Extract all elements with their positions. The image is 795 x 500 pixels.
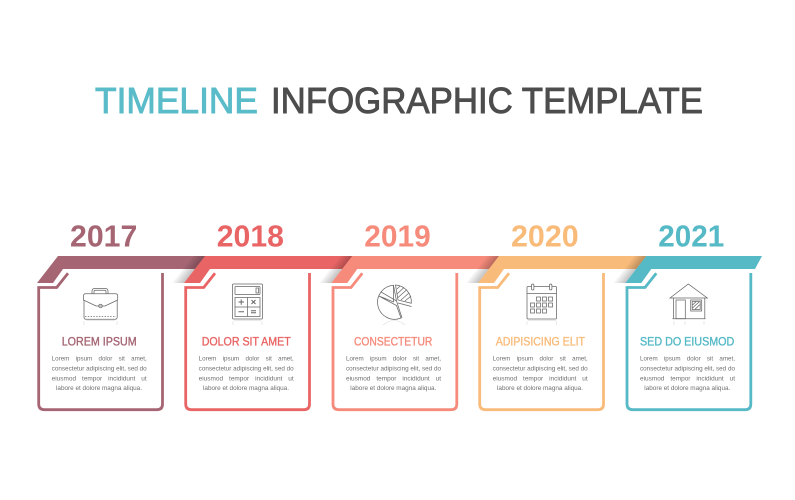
- body text: [52, 356, 147, 392]
- year 2020: 2020: [511, 219, 579, 254]
- body text: Lorem ipsum dolor sit amet,: [52, 356, 147, 363]
- ribbon 2018: [172, 256, 357, 283]
- panel: 2017: [37, 219, 210, 410]
- body text: labore et dolore magna aliqua.: [350, 385, 437, 392]
- year 2017: 2017: [70, 219, 137, 254]
- title: INFOGRAPHIC TEMPLATE: [271, 80, 703, 121]
- heading: ADIPISICING ELIT: [496, 336, 585, 348]
- panel: 2019: [319, 219, 504, 410]
- body text: Lorem ipsum dolor sit amet,: [640, 356, 735, 363]
- body text: Lorem ipsum dolor sit amet,: [493, 356, 588, 363]
- body text: consectetur adipiscing elit, sed do: [52, 366, 147, 372]
- body text: consectetur adipiscing elit, sed do: [346, 366, 442, 372]
- body text: [199, 356, 294, 392]
- body text: consectetur adipiscing elit, sed do: [640, 366, 736, 372]
- body text: Lorem ipsum dolor sit amet,: [199, 356, 294, 363]
- year 2018: 2018: [217, 219, 284, 254]
- year 2019: 2019: [364, 219, 431, 254]
- ribbon 2017: [37, 256, 210, 283]
- body text: [346, 356, 442, 392]
- card outline 2021: [627, 273, 751, 410]
- body text: Lorem ipsum dolor sit amet,: [346, 356, 441, 363]
- body text: labore et dolore magna aliqua.: [203, 385, 289, 392]
- body text: eiusmod tempor incididunt ut: [199, 375, 294, 382]
- ribbon 2019: [319, 256, 504, 283]
- body text: [493, 356, 588, 392]
- body text: consectetur adipiscing elit, sed do: [493, 366, 588, 372]
- card outline 2019: [333, 273, 457, 410]
- heading: DOLOR SIT AMET: [202, 336, 291, 348]
- ribbon 2021: [613, 256, 762, 283]
- ribbon 2020: [466, 256, 651, 283]
- card outline 2017: [39, 273, 163, 410]
- icon: house: [670, 284, 707, 325]
- icon: calendar: [527, 284, 556, 325]
- icon: briefcase: [84, 288, 118, 325]
- panel: 2018: [172, 219, 357, 410]
- heading: LOREM IPSUM: [62, 336, 137, 348]
- icon: calculator: [232, 284, 262, 325]
- heading: CONSECTETUR: [354, 336, 432, 348]
- body text: labore et dolore magna aliqua.: [497, 385, 583, 392]
- panel: 2020: [466, 219, 651, 410]
- icon: pie chart: [378, 285, 412, 325]
- body text: labore et dolore magna aliqua.: [56, 385, 142, 392]
- body text: consectetur adipiscing elit, sed do: [199, 366, 294, 372]
- body text: [640, 356, 736, 392]
- body text: eiusmod tempor incididunt ut: [640, 375, 735, 382]
- heading: SED DO EIUSMOD: [640, 336, 734, 348]
- body text: eiusmod tempor incididunt ut: [493, 375, 588, 382]
- card outline 2018: [186, 273, 310, 410]
- title: [95, 80, 703, 121]
- title: TIMELINE: [95, 80, 258, 121]
- body text: eiusmod tempor incididunt ut: [346, 375, 441, 382]
- year 2021: 2021: [658, 219, 724, 254]
- body text: labore et dolore magna aliqua.: [644, 385, 731, 392]
- body text: eiusmod tempor incididunt ut: [52, 375, 147, 382]
- card outline 2020: [480, 273, 604, 410]
- panel: 2021: [613, 219, 762, 410]
